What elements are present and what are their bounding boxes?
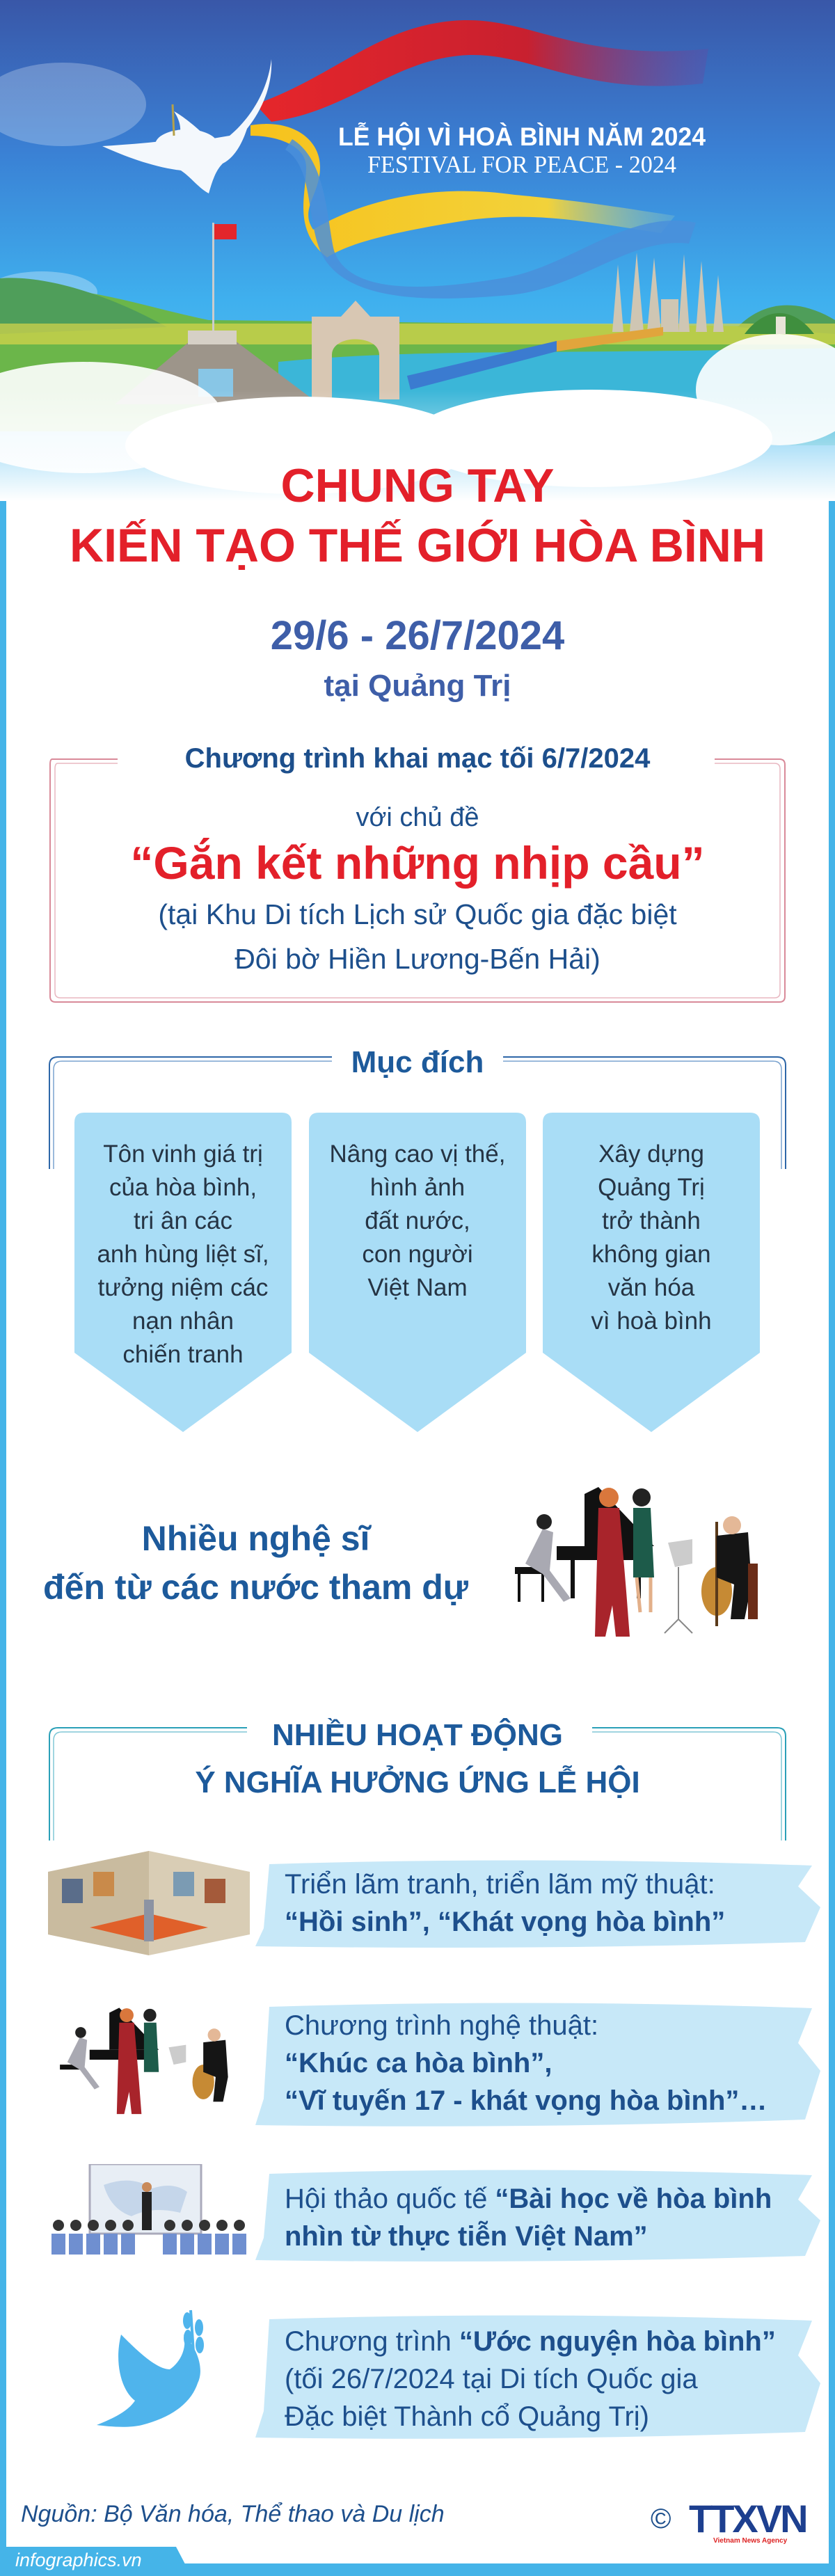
card 1: của hòa bình, <box>109 1174 257 1201</box>
card 2: Nâng cao vị thế, <box>330 1140 505 1168</box>
text: Triển lãm tranh, triển lãm mỹ thuật: <box>285 1869 715 1900</box>
card 3: Xây dựng <box>598 1140 704 1168</box>
text: infographics.vn <box>15 2550 142 2570</box>
text: many artists <box>43 1519 468 1607</box>
card 1: nạn nhân <box>132 1307 234 1335</box>
card 3: Quảng Trị <box>598 1174 705 1201</box>
flag <box>212 223 214 334</box>
heading: activities: Ý NGHĨA HƯỞNG ỨNG LỄ HỘI <box>195 1765 640 1799</box>
location: tại Quảng Trị <box>324 669 511 703</box>
panel: opening ceremony: “Gắn kết những nhịp cầu” <box>130 837 705 889</box>
land <box>0 289 835 431</box>
text: Chương trình “Ước nguyện hòa bình” <box>285 2326 776 2357</box>
side border strips <box>0 0 6 2576</box>
panel: opening ceremony <box>49 743 786 1003</box>
clouds <box>0 334 835 494</box>
main title: KIẾN TẠO THẾ GIỚI HÒA BÌNH <box>70 519 765 572</box>
text: Chương trình nghệ thuật: <box>285 2010 598 2041</box>
panel: activities <box>49 1718 786 1840</box>
card 3: không gian <box>591 1241 711 1268</box>
activity 2 <box>60 2003 820 2126</box>
ribbons <box>250 20 708 299</box>
heading: Mục đích: Mục đích <box>351 1045 484 1079</box>
card 1: chiến tranh <box>122 1341 244 1368</box>
card 1: tưởng niệm các <box>98 1274 268 1301</box>
hero illustration <box>0 0 835 501</box>
main title: CHUNG TAY <box>281 459 554 512</box>
panel: opening ceremony: Đôi bờ Hiền Lương-Bến Hải) <box>234 943 601 975</box>
banner <box>255 1861 820 1948</box>
footer bar <box>0 2563 835 2576</box>
icon: musicians large <box>515 1487 758 1637</box>
logo: TTXVN: Vietnam News Agency <box>713 2537 787 2545</box>
activity 4 <box>97 2310 820 2439</box>
heading: activities: NHIỀU HOẠT ĐỘNG <box>272 1718 563 1752</box>
text: many artists: đến từ các nước tham dự <box>43 1568 468 1607</box>
icon: musicians <box>60 2007 228 2114</box>
text <box>285 2184 772 2252</box>
text: “Hồi sinh”, “Khát vọng hòa bình” <box>285 1907 725 1937</box>
card 1 <box>74 1113 292 1432</box>
banner <box>255 2003 820 2126</box>
date: 29/6 - 26/7/2024 <box>271 613 564 658</box>
hero illustration: FESTIVAL FOR PEACE - 2024 <box>367 151 676 178</box>
text <box>285 1869 725 1937</box>
card 1: tri ân các <box>134 1207 232 1234</box>
activity 3 <box>51 2164 820 2261</box>
heading: Chương trình khai mạc tối 6/7/2024 <box>185 743 650 774</box>
icon: gallery <box>48 1851 250 1955</box>
main title <box>70 459 765 572</box>
pyramid <box>115 334 319 404</box>
theme text: với chủ đề <box>356 803 479 832</box>
logo: TTXVN <box>651 2497 806 2545</box>
river <box>278 348 835 445</box>
banner <box>255 2170 820 2261</box>
icon: conference <box>51 2164 246 2255</box>
banner <box>255 2316 820 2439</box>
source: Nguồn: Bộ Văn hóa, Thể thao và Du lịch <box>21 2501 445 2527</box>
heading: activities <box>195 1718 640 1799</box>
icon: dove <box>97 2310 204 2427</box>
monument hill <box>745 313 814 334</box>
text: (tối 26/7/2024 tại Di tích Quốc gia <box>285 2364 698 2394</box>
card 3: vì hoà bình <box>591 1307 712 1335</box>
card 1: Tôn vinh giá trị <box>103 1140 263 1168</box>
panel: purpose <box>49 1045 786 1169</box>
text: Hội thảo quốc tế “Bài học về hòa bình <box>285 2184 772 2214</box>
card 2: đất nước, <box>365 1207 470 1234</box>
card 3: trở thành <box>602 1207 701 1234</box>
card 2 <box>309 1113 526 1432</box>
arch <box>312 317 399 399</box>
logo: TTXVN: © <box>651 2504 671 2534</box>
bridge <box>407 341 557 390</box>
spires <box>612 253 724 332</box>
card 3: văn hóa <box>608 1274 694 1301</box>
text: Đặc biệt Thành cổ Quảng Trị) <box>285 2401 649 2432</box>
card 3 <box>543 1113 760 1432</box>
text: “Vĩ tuyến 17 - khát vọng hòa bình”… <box>285 2085 767 2116</box>
text <box>285 2010 767 2116</box>
title in hero: LỄ HỘI VÌ HOÀ BÌNH NĂM 2024 <box>338 122 706 151</box>
card 1: anh hùng liệt sĩ, <box>97 1241 269 1268</box>
text <box>285 2326 776 2432</box>
text: many artists: Nhiều nghệ sĩ <box>142 1519 369 1558</box>
card 2: hình ảnh <box>370 1174 465 1201</box>
activity 1 <box>48 1851 820 1955</box>
text: “Khúc ca hòa bình”, <box>285 2048 552 2078</box>
panel: opening ceremony: (tại Khu Di tích Lịch sử Quốc gia đặc biệt <box>158 898 677 930</box>
dove <box>102 59 271 193</box>
card 2: Việt Nam <box>367 1274 468 1301</box>
logo: TTXVN: TTXVN <box>689 2497 806 2541</box>
card 2: con người <box>362 1241 473 1268</box>
text: nhìn từ thực tiễn Việt Nam” <box>285 2221 648 2252</box>
